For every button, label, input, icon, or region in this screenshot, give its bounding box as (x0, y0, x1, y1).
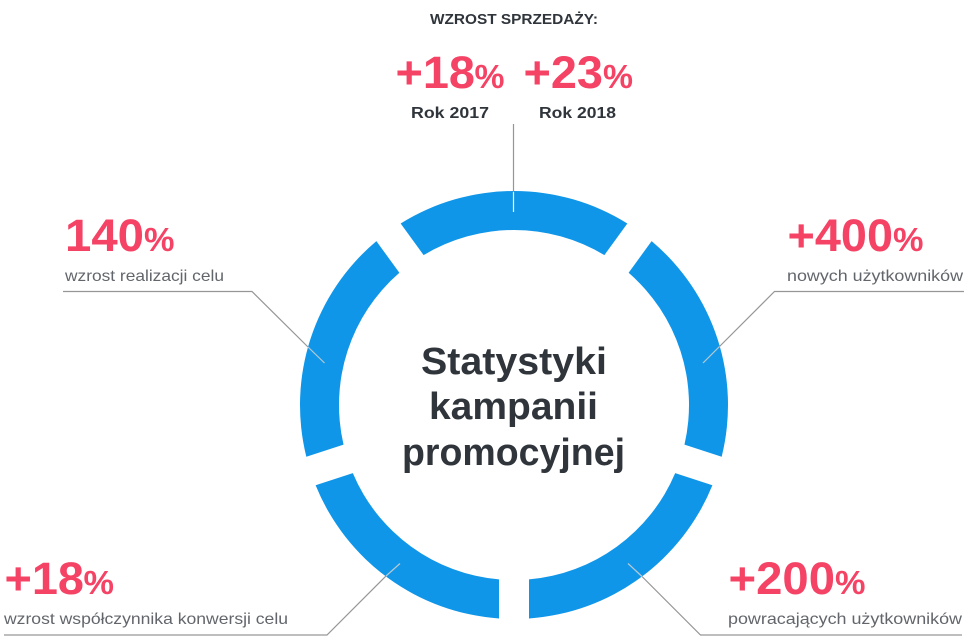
stat: +18%: % (84, 564, 114, 601)
stat: 2018: % (603, 58, 633, 95)
leader line: left (63, 292, 324, 363)
stat: 2017: % (474, 58, 504, 95)
ring segment: bottom right (529, 473, 712, 618)
stat: 140%: 140 (65, 210, 144, 261)
stat: +18%: +18 (4, 553, 84, 604)
ring segment: top (401, 191, 627, 255)
stat: +400%: % (893, 221, 924, 258)
stat: +18% (4, 553, 114, 604)
center title: kampanii (429, 386, 598, 428)
callout: +400% (703, 210, 964, 363)
label: goal completion growth: wzrost realizacji celu (64, 268, 224, 285)
callout: sales growth (396, 11, 633, 212)
stat: +200%: % (835, 564, 866, 601)
ring segment: bottom left (316, 473, 499, 618)
label: new users: nowych użytkowników (787, 268, 963, 285)
center title: promocyjnej (402, 432, 625, 474)
ring segment: right (629, 241, 728, 457)
label: 2017: Rok 2017 (411, 105, 489, 122)
label: 2018: Rok 2018 (539, 105, 616, 122)
heading: sales growth: WZROST SPRZEDAŻY: (430, 11, 598, 28)
stat: 140% (65, 210, 174, 261)
center title: Statystyki (421, 341, 607, 383)
label: returning users: powracających użytkowników (728, 611, 962, 628)
leader line: bottom right (628, 564, 962, 635)
stat: 2018: +23 (524, 47, 603, 98)
callout: +200% (628, 553, 962, 635)
leader line: right (703, 292, 964, 363)
ring chart (300, 191, 728, 618)
label: conversion rate growth: wzrost współczynnika konwersji celu (3, 611, 288, 628)
ring segment: left (300, 241, 399, 457)
stat: 140%: % (144, 221, 174, 258)
callout: 140% (63, 210, 324, 363)
stat: 2017: +18 (396, 47, 475, 98)
callout: +18% conversion (3, 553, 400, 635)
stat: 2018 (524, 47, 633, 98)
leader line: bottom left (4, 564, 400, 635)
stat: +200%: +200 (728, 553, 835, 604)
center title (402, 341, 625, 474)
leader line: top (512, 124, 514, 212)
stat: +400%: +400 (788, 210, 893, 261)
